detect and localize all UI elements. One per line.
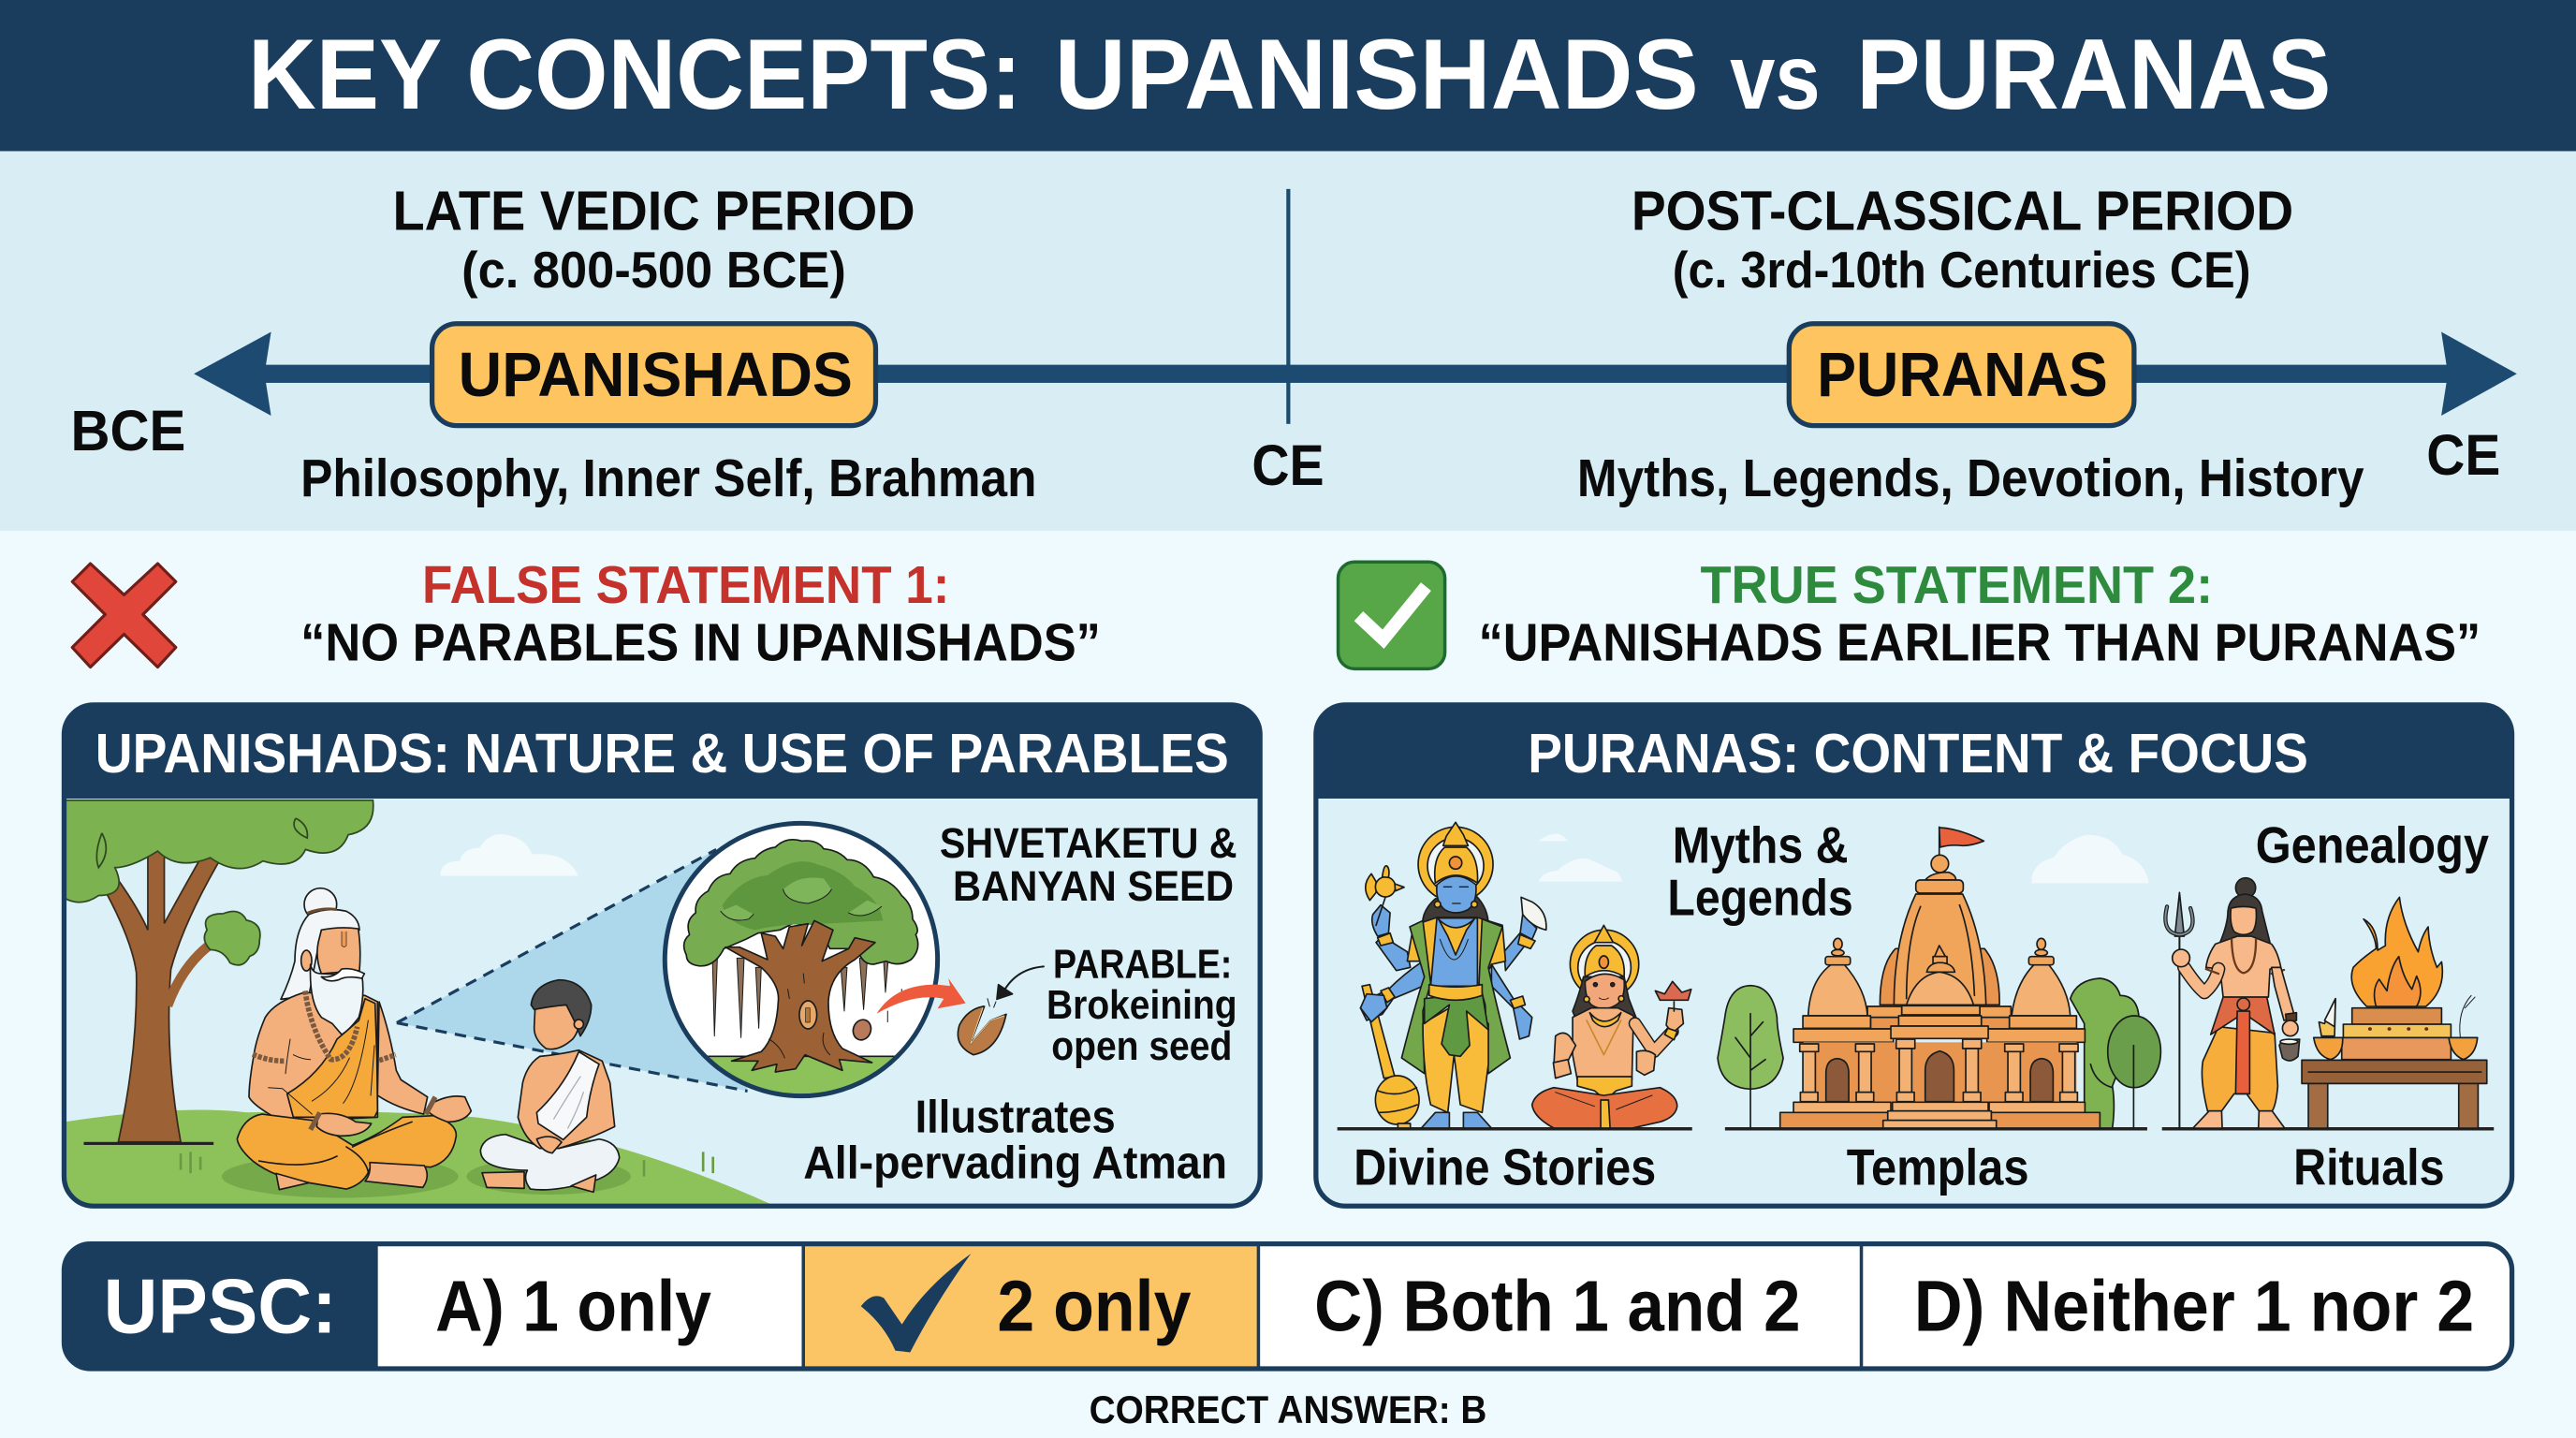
panel header: UPANISHADS: NATURE & USE OF PARABLES — [95, 722, 1229, 785]
period heading: late vedic: LATE VEDIC PERIOD — [392, 180, 915, 242]
title banner: vs — [1730, 25, 1821, 128]
title banner: UPANISHADS — [1055, 18, 1699, 130]
label: parable: PARABLE: — [1053, 941, 1232, 987]
option D: D) Neither 1 nor 2 — [1914, 1267, 2474, 1347]
clouds — [1538, 834, 2149, 884]
option A: A) 1 only — [435, 1267, 711, 1347]
panel: timeline — [0, 151, 2576, 531]
pill: puranas — [1789, 324, 2134, 426]
answer bar — [64, 1244, 2512, 1369]
label: upanishads themes: Philosophy, Inner Self, Brahman — [300, 448, 1036, 507]
tree — [66, 800, 373, 1145]
arrow: red curved — [877, 978, 966, 1014]
pill: upanishads: UPANISHADS — [459, 341, 853, 410]
label: shvetaketu — [940, 819, 1237, 910]
lakshmi — [1532, 925, 1691, 1128]
panel: puranas content — [1316, 705, 2512, 1206]
label: atman — [803, 1092, 1227, 1188]
option B correct — [803, 1244, 1258, 1369]
label: parable: Brokeining — [1046, 982, 1237, 1028]
title banner — [0, 0, 2576, 151]
period heading: post-classical — [1632, 180, 2293, 299]
trees beside temple — [1718, 978, 2160, 1128]
false statement: “NO PARABLES IN UPANISHADS” — [300, 613, 1101, 672]
label: myths and legends — [1667, 816, 1853, 927]
true statement — [1479, 555, 2481, 672]
dashed cone — [397, 849, 748, 1091]
ground — [63, 1109, 779, 1208]
period heading: late vedic: (c. 800-500 BCE) — [461, 242, 846, 299]
cloud — [440, 834, 578, 875]
CE divider — [1286, 189, 1290, 424]
period heading: post-classical: POST-CLASSICAL PERIOD — [1632, 180, 2293, 242]
title banner: KEY CONCEPTS: — [248, 18, 1022, 130]
panel header — [64, 705, 1260, 799]
label: myths and legends: Myths & — [1673, 816, 1848, 873]
period heading: post-classical: (c. 3rd-10th Centuries CE) — [1673, 242, 2250, 299]
label: BCE: BCE — [70, 399, 185, 463]
label: atman: Illustrates — [915, 1092, 1116, 1142]
icon: green check — [1339, 562, 1445, 668]
label: shvetaketu: SHVETAKETU & — [940, 819, 1237, 867]
false statement — [300, 555, 1101, 672]
label: genealogy: Genealogy — [2256, 816, 2489, 873]
icon: red cross — [72, 564, 176, 668]
sage — [237, 888, 471, 1190]
title banner: PURANAS — [1856, 18, 2331, 130]
correct answer note: CORRECT ANSWER: B — [1090, 1387, 1486, 1431]
true statement: “UPANISHADS EARLIER THAN PURANAS” — [1479, 613, 2481, 672]
pill: puranas: PURANAS — [1817, 341, 2108, 410]
label: rituals: Rituals — [2293, 1138, 2445, 1196]
student — [480, 980, 620, 1192]
flames — [2351, 897, 2442, 1006]
label: temples: Templas — [1847, 1138, 2029, 1196]
magnifier: banyan tree — [663, 820, 940, 1099]
panel: upanishads parables — [63, 705, 1260, 1208]
label: shvetaketu: BANYAN SEED — [953, 862, 1234, 910]
label: parable — [1046, 941, 1237, 1069]
label: puranas themes: Myths, Legends, Devotion, History — [1577, 448, 2364, 507]
option B correct: 2 only — [997, 1267, 1191, 1347]
label: myths and legends: Legends — [1667, 870, 1853, 927]
upsc label: UPSC: — [104, 1263, 337, 1349]
temple — [1780, 827, 2100, 1128]
priest — [2165, 878, 2300, 1129]
label: CE right: CE — [2426, 423, 2500, 488]
ground lines — [1338, 1128, 2494, 1130]
true statement: TRUE STATEMENT 2: — [1701, 555, 2213, 614]
arrow: parable pointer — [997, 966, 1044, 999]
temple flag — [1939, 827, 1983, 857]
icon: split seed — [958, 999, 1006, 1055]
pill: upanishads — [432, 324, 875, 426]
period heading: late vedic — [392, 180, 915, 299]
label: divine stories: Divine Stories — [1354, 1138, 1656, 1196]
timeline arrow — [194, 332, 2517, 416]
ritual fire — [2302, 897, 2487, 1128]
label: CE middle: CE — [1251, 433, 1325, 498]
panel header: PURANAS: CONTENT & FOCUS — [1528, 722, 2308, 785]
label: parable: open seed — [1051, 1023, 1232, 1069]
illustration: forest scene — [63, 800, 779, 1208]
option C: C) Both 1 and 2 — [1314, 1267, 1801, 1347]
vishnu — [1360, 822, 1546, 1128]
grass — [181, 1152, 713, 1177]
icon: falling seed — [850, 990, 901, 1043]
upsc label — [64, 1244, 378, 1369]
false statement: FALSE STATEMENT 1: — [422, 555, 949, 614]
panel header — [1316, 705, 2512, 799]
label: atman: All-pervading Atman — [803, 1137, 1227, 1188]
